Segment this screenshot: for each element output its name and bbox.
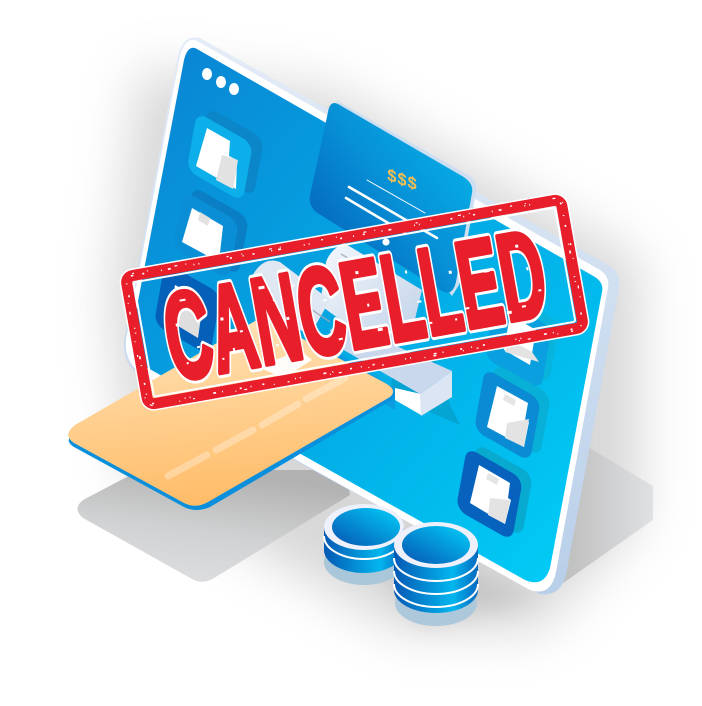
slot blue interior — [318, 340, 395, 410]
coin stack left — [324, 504, 404, 585]
paper on card — [258, 350, 312, 378]
monitor bezel — [126, 40, 608, 592]
monitor shell — [124, 37, 619, 594]
coin shadow — [395, 580, 477, 626]
left column tile 3 — [154, 262, 221, 356]
amount label: $$$ — [387, 164, 418, 195]
coin layers — [394, 547, 478, 613]
reader rounded left cap — [250, 260, 330, 335]
card reader — [250, 243, 452, 416]
card edge — [69, 392, 395, 510]
left column tile 1 — [187, 107, 264, 202]
card stripe dashes — [168, 378, 345, 476]
right column tile 1 — [485, 290, 560, 390]
payment receipt panel — [310, 100, 476, 296]
window dots — [202, 68, 239, 95]
coin stack right — [394, 522, 478, 626]
floor shadow: card — [78, 470, 350, 582]
receipt text lines — [346, 180, 437, 238]
stamp border — [120, 193, 589, 411]
reader slot strokes — [305, 254, 360, 322]
white marker dot — [382, 238, 390, 246]
right column tile 2 — [474, 363, 551, 462]
left column tile 2 — [173, 186, 249, 280]
coin shadow — [324, 539, 404, 585]
receipt back edge — [336, 100, 476, 296]
screen shadow below reader — [390, 345, 460, 425]
card face — [68, 317, 393, 506]
payment card — [68, 317, 395, 510]
slot lip white — [300, 340, 421, 415]
stamp distress speckle — [172, 237, 544, 372]
floor shadow: monitor — [540, 447, 653, 588]
receipt face — [310, 103, 472, 293]
reader rear body — [320, 243, 422, 348]
coin layers — [324, 528, 404, 573]
monitor — [124, 37, 619, 594]
monitor screen — [131, 48, 602, 582]
reader slot bar — [330, 322, 452, 394]
right column tile 3 — [456, 443, 533, 541]
soft background shadow — [110, 70, 640, 630]
stamp: CANCELLED — [120, 193, 590, 414]
slot end face — [420, 371, 452, 416]
